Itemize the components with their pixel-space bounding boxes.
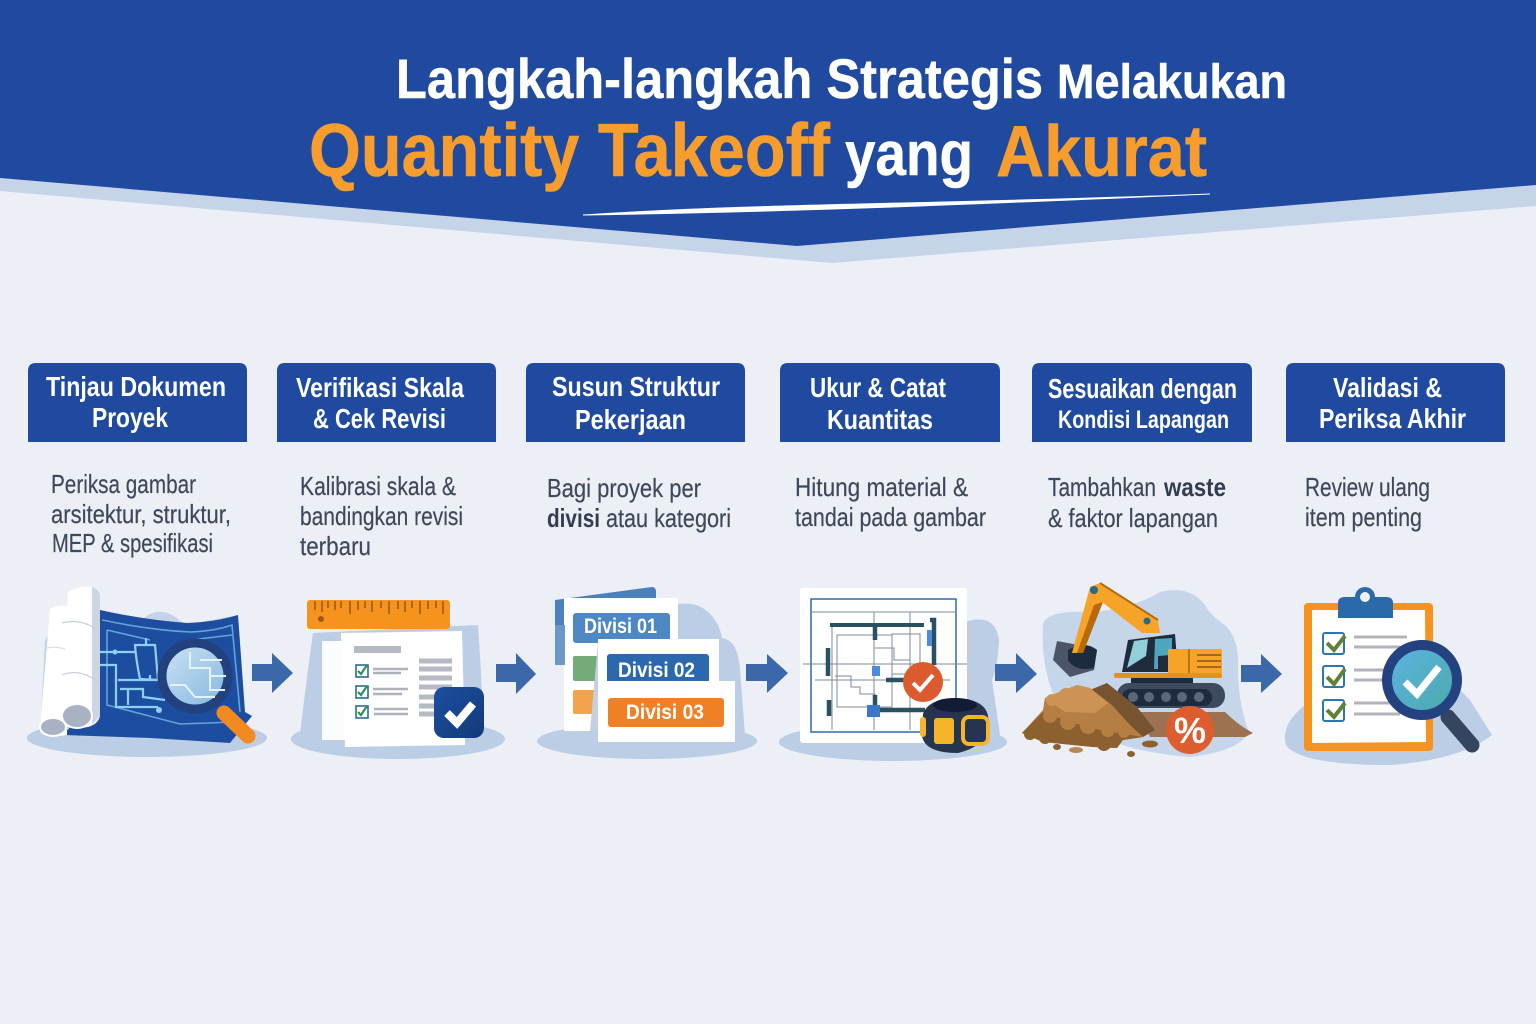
excavator — [1053, 583, 1225, 708]
step 1 description: MEP & spesifikasi — [52, 528, 213, 558]
floor plan sheet — [800, 588, 967, 743]
step 6 heading: Periksa Akhir — [1319, 403, 1466, 434]
paper divisi 03 — [598, 681, 735, 742]
step 1 heading — [28, 363, 247, 442]
icon: blueprint with magnifier — [27, 587, 267, 757]
percent badge: % — [1174, 710, 1206, 751]
step 2 description: Kalibrasi skala & — [300, 471, 456, 501]
back folder — [555, 587, 656, 665]
step 2 heading: Verifikasi Skala — [296, 372, 464, 403]
step 2 description: bandingkan revisi — [300, 501, 463, 531]
step 6 description: Review ulang — [1305, 472, 1430, 502]
title line 2: yang — [845, 120, 973, 189]
step 3 heading: Pekerjaan — [575, 404, 686, 435]
step 6 description: item penting — [1305, 502, 1422, 532]
icon: clipboard with magnifier — [1285, 587, 1492, 765]
step 5 heading: Sesuaikan dengan — [1048, 373, 1237, 404]
icon: division folders — [537, 587, 757, 759]
step 4 description: Hitung material & — [795, 472, 968, 502]
step 3 description: atau kategori — [606, 503, 731, 533]
step 1 heading: Proyek — [92, 402, 168, 433]
arrow 1 — [252, 653, 293, 693]
arrow 3 — [746, 654, 788, 693]
rolled plans — [40, 587, 100, 736]
checklist items — [1323, 633, 1407, 721]
blueprint sheet — [63, 610, 252, 743]
step 4 description — [795, 472, 986, 532]
step 3 heading — [526, 363, 745, 442]
arrow 5 — [1241, 654, 1282, 693]
step 4 heading — [780, 363, 1000, 442]
paper divisi 02: Divisi 02 — [618, 659, 695, 682]
title line 2 — [309, 108, 1207, 192]
header banner — [0, 0, 1536, 263]
check badge — [434, 687, 484, 738]
clipboard — [1304, 587, 1433, 751]
arrow 4 — [995, 653, 1037, 693]
step 5 description: & faktor lapangan — [1048, 503, 1218, 533]
title underline swoosh — [583, 194, 1210, 215]
magnifier — [162, 643, 248, 736]
step 5 heading — [1032, 363, 1252, 442]
title — [309, 47, 1287, 192]
title line 1: Melakukan — [1057, 56, 1287, 109]
icon: ruler and checklist — [291, 600, 505, 759]
ruler — [307, 600, 450, 629]
step 5 description: Tambahkan — [1048, 472, 1156, 502]
tape measure — [920, 698, 988, 753]
magnifier — [1387, 645, 1472, 745]
paper divisi 01 — [555, 598, 678, 731]
step 6 heading: Validasi & — [1333, 372, 1442, 403]
paper divisi 03: Divisi 03 — [626, 701, 704, 724]
step 2 description — [300, 471, 463, 561]
step 3 description: Bagi proyek per — [547, 473, 701, 503]
step 4 description: tandai pada gambar — [795, 502, 986, 532]
step 5 heading: Kondisi Lapangan — [1058, 406, 1229, 434]
title line 2: Quantity Takeoff — [309, 108, 831, 192]
percent badge — [1166, 706, 1214, 754]
paper divisi 01: Divisi 01 — [584, 615, 657, 638]
check badge — [903, 662, 943, 702]
back paper — [322, 641, 348, 740]
step 4 heading: Ukur & Catat — [810, 372, 946, 403]
ground — [1140, 712, 1253, 737]
step 1 description: Periksa gambar — [51, 469, 196, 499]
step 3 heading: Susun Struktur — [552, 371, 720, 402]
step 2 heading: & Cek Revisi — [313, 403, 446, 434]
step 3 description: divisi — [547, 503, 600, 533]
title line 1: Langkah-langkah Strategis — [396, 47, 1043, 110]
step 4 heading: Kuantitas — [827, 404, 933, 435]
step 5 description: waste — [1163, 472, 1226, 502]
step 6 description — [1305, 472, 1430, 532]
step 1 description: arsitektur, struktur, — [51, 499, 231, 529]
step 2 description: terbaru — [300, 531, 371, 561]
step 3 description — [547, 473, 731, 533]
soil pile — [1022, 683, 1158, 757]
step 5 description — [1048, 472, 1226, 533]
arrow 2 — [496, 653, 536, 694]
step 6 heading — [1286, 363, 1505, 442]
step 1 heading: Tinjau Dokumen — [46, 371, 226, 402]
step 1 description — [51, 469, 231, 558]
title line 2: Akurat — [996, 112, 1207, 192]
paper divisi 02 — [598, 639, 719, 699]
icon: floor plan and tape measure — [779, 588, 1007, 761]
checklist sheet — [341, 631, 465, 747]
step 2 heading — [277, 363, 496, 442]
icon: excavator on soil with percent badge — [1022, 583, 1253, 757]
